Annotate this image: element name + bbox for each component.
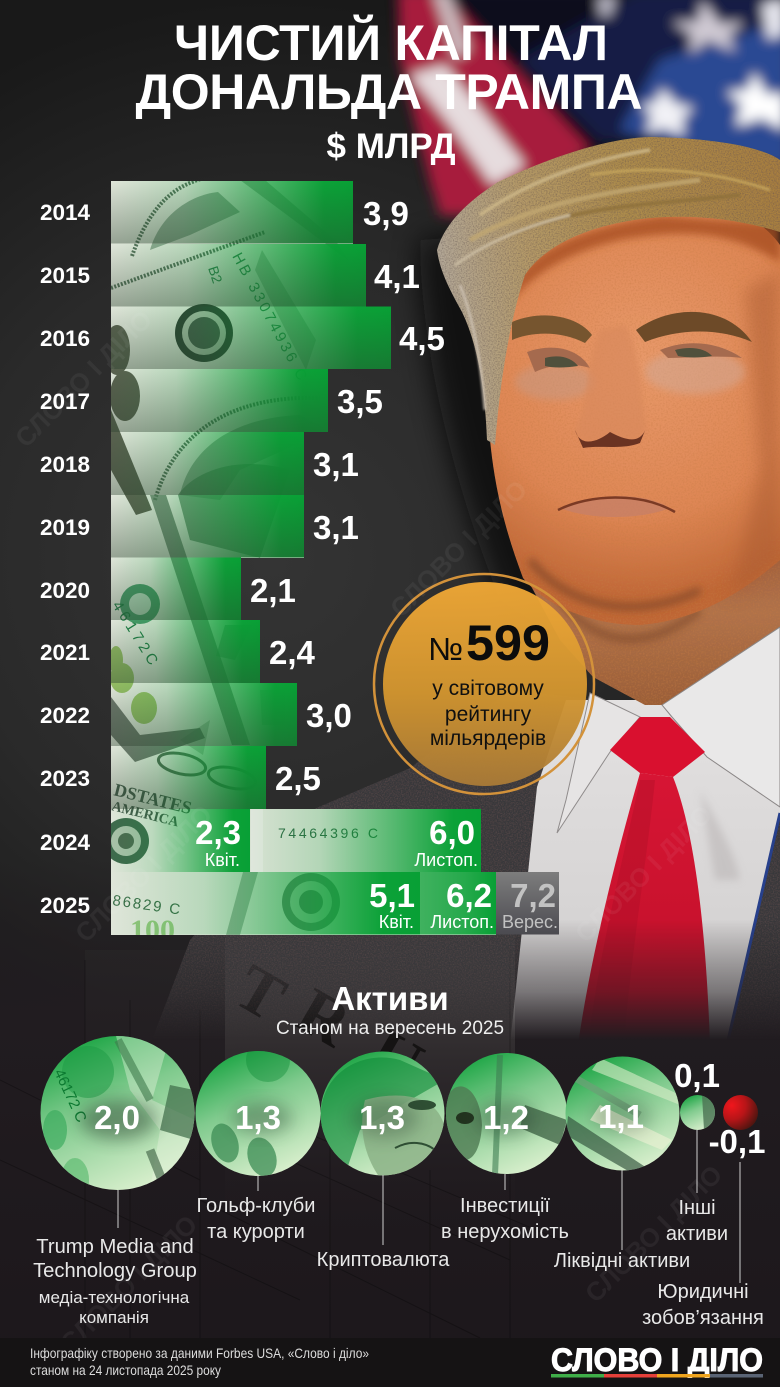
forehead hairline shadow (513, 216, 780, 300)
bar 2024: 2024 (40, 830, 91, 855)
callout: rank 599 badge: рейтингу (445, 703, 532, 726)
banknote photo texture: 46172C (109, 598, 161, 668)
eyes (527, 348, 590, 372)
callout: rank 599 badge: мільярдерів (430, 727, 546, 750)
bar 2017: 3,5 (337, 383, 383, 420)
background photo: Trump Tower facade (0, 930, 560, 1338)
background photo: Trump Tower facade: M (436, 1065, 527, 1160)
asset: liquid assets (554, 1056, 690, 1272)
title (136, 14, 642, 166)
bar 2025: 7,2 (510, 877, 556, 914)
tie (578, 773, 710, 1045)
asset: golf clubs and resorts: 1,3 (235, 1099, 281, 1136)
watermarks: СЛОВО І ДІЛО (384, 474, 533, 623)
source note (30, 1345, 369, 1378)
asset: cryptocurrency: 1,3 (359, 1099, 405, 1136)
nose (575, 325, 646, 444)
banknote photo texture: DSTATES (112, 779, 194, 818)
asset: liquid assets: Ліквідні активи (554, 1250, 690, 1272)
bar 2023: 2023 (40, 766, 90, 791)
bar 2025: 6,2 (446, 877, 492, 914)
bar 2014: 2014 (40, 200, 91, 225)
title: ДОНАЛЬДА ТРАМПА (136, 64, 642, 120)
asset: real estate investments (441, 1053, 569, 1243)
background photo: Trump Tower facade: R (285, 974, 364, 1062)
bar 2022: 2022 (40, 703, 90, 728)
bar 2024: Листоп. (414, 850, 478, 870)
asset: legal liabilities (642, 1095, 765, 1329)
asset: Trump Media and Technology Group: 2,0 (94, 1099, 140, 1136)
asset: legal liabilities: зобов’язання (642, 1307, 764, 1329)
head (490, 194, 780, 625)
body (160, 560, 780, 1035)
bar 2023 (40, 746, 321, 809)
asset: golf clubs and resorts: Гольф-клуби (197, 1195, 315, 1217)
bar 2022 (40, 683, 352, 746)
brows (512, 315, 592, 343)
asset: golf clubs and resorts: та курорти (207, 1221, 305, 1243)
source note: станом на 24 листопада 2025 року (30, 1362, 221, 1378)
footer band (0, 1338, 780, 1387)
callout: rank 599 badge: № (428, 631, 463, 667)
title: ЧИСТИЙ КАПІТАЛ (174, 14, 608, 71)
bar 2014 (40, 181, 409, 244)
bar 2019: 3,1 (313, 509, 359, 546)
callout: rank 599 badge: у світовому (432, 677, 544, 700)
banknote photo texture: 74464396 C (278, 825, 378, 841)
bar 2025: 5,1 (369, 877, 415, 914)
bar 2025 (40, 872, 559, 934)
hair highlights (455, 150, 770, 410)
watermarks: СЛОВО І ДІЛО (569, 799, 718, 948)
right side face shadow (730, 270, 780, 600)
asset: Trump Media and Technology Group: 46172 C (50, 1067, 90, 1125)
callout: rank 599 badge: 599 (466, 615, 550, 671)
bar 2018 (40, 432, 359, 495)
mouth (560, 496, 670, 517)
watermarks (9, 304, 728, 1358)
banknote photo texture: AMERICA (110, 799, 181, 831)
banknote photo texture: 100 (130, 914, 175, 947)
asset: legal liabilities: Юридичні (657, 1281, 749, 1303)
bar 2020: 2,1 (250, 572, 296, 609)
bar 2021 (40, 620, 316, 683)
bar 2025: Листоп. (430, 912, 494, 932)
asset: golf clubs and resorts (196, 1038, 320, 1243)
asset: other assets: 0,1 (674, 1057, 720, 1094)
bar 2015: 2015 (40, 263, 90, 288)
asset: legal liabilities: -0,1 (709, 1123, 765, 1160)
banknote photo texture: B2 (205, 264, 226, 285)
suit jacket (150, 690, 780, 1045)
bar 2014: 3,9 (363, 195, 409, 232)
asset: Trump Media and Technology Group: медіа-технологічна (39, 1288, 190, 1307)
bar 2019 (40, 495, 359, 558)
heading: assets: Активи (331, 980, 449, 1017)
diagonal engraved strip (150, 495, 250, 745)
bar chart: net worth by year (40, 178, 559, 947)
background photo: American flag (395, 0, 780, 215)
collar shadows (557, 693, 640, 833)
bar 2024: 6,0 (429, 814, 475, 851)
watermarks: СЛОВО І ДІЛО (54, 1209, 203, 1358)
bar 2016: 2016 (40, 326, 90, 351)
bar 2018: 3,1 (313, 446, 359, 483)
bar 2025: Квіт. (379, 912, 414, 932)
heading: assets: Станом на вересень 2025 (276, 1018, 504, 1039)
bar 2023: 2,5 (275, 760, 321, 797)
bar 2025: Верес. (502, 912, 558, 932)
asset: real estate investments: Інвестиції (460, 1195, 550, 1217)
bar 2015 (40, 244, 420, 306)
logo: СЛОВО І ДІЛО (551, 1342, 763, 1378)
asset: Trump Media and Technology Group: Trump Media and (36, 1236, 194, 1258)
bar 2025: 2025 (40, 893, 90, 918)
asset: cryptocurrency (317, 1052, 450, 1271)
asset: Trump Media and Technology Group (33, 1036, 197, 1327)
asset: real estate investments: 1,2 (483, 1099, 529, 1136)
source note: Інфографіку створено за даними Forbes USA, «Слово і діло» (30, 1345, 369, 1361)
watermarks: СЛОВО І ДІЛО (9, 304, 158, 453)
bar 2024 (40, 809, 481, 872)
lapel edge (727, 813, 780, 1045)
hair (437, 137, 780, 445)
bar 2022: 3,0 (306, 697, 352, 734)
bar 2024: Квіт. (205, 850, 240, 870)
chin (530, 560, 700, 607)
background photo: Trump Tower facade: T (223, 950, 298, 1036)
watermarks: СЛОВО І ДІЛО (579, 1159, 728, 1308)
shirt (512, 700, 780, 1034)
asset: other assets: Інші (678, 1197, 716, 1219)
callout: rank 599 badge (374, 574, 594, 794)
background photo: Trump Tower facade: U (357, 1015, 435, 1102)
asset: Trump Media and Technology Group: компанія (79, 1308, 149, 1327)
asset: cryptocurrency: Криптовалюта (317, 1249, 450, 1271)
bar 2016 (40, 306, 445, 369)
bar 2020 (40, 558, 296, 620)
neck (531, 560, 780, 705)
eye sockets (515, 364, 595, 400)
bar 2017 (40, 369, 383, 432)
bar 2019: 2019 (40, 515, 90, 540)
bar 2021: 2021 (40, 640, 90, 665)
banknote photo texture: HB 33074936 C (228, 250, 310, 383)
portrait of Donald Trump (150, 137, 780, 1045)
asset: other assets (666, 1057, 728, 1245)
asset: liquid assets: 1,1 (598, 1098, 644, 1135)
title: $ МЛРД (326, 127, 456, 166)
banknote photo texture: 86829 C (111, 892, 181, 918)
dark halo around the head (420, 230, 600, 640)
banknote photo texture (103, 178, 496, 947)
bar 2015: 4,1 (374, 258, 420, 295)
bar 2017: 2017 (40, 389, 90, 414)
bar 2020: 2020 (40, 578, 90, 603)
heading: assets (276, 980, 504, 1039)
bar 2016: 4,5 (399, 320, 445, 357)
asset: Trump Media and Technology Group: Technology Group (33, 1260, 197, 1282)
watermarks: СЛОВО І ДІЛО (69, 799, 218, 948)
bar 2018: 2018 (40, 452, 90, 477)
bar 2021: 2,4 (269, 634, 316, 671)
asset: real estate investments: в нерухомість (441, 1221, 569, 1243)
bar 2024: 2,3 (195, 814, 241, 851)
asset: other assets: активи (666, 1223, 728, 1245)
